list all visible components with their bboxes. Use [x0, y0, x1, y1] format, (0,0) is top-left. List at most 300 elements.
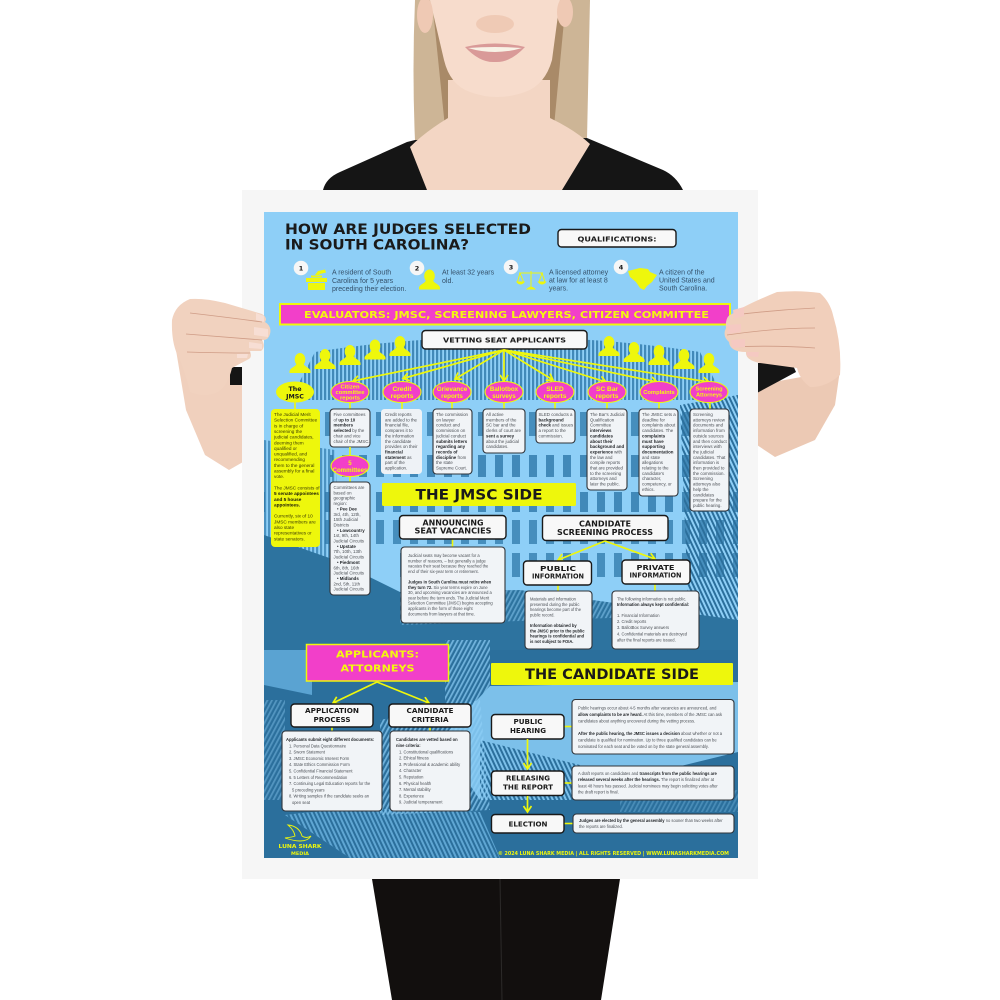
panel: ballotbox surveys: candidates. — [486, 444, 508, 449]
panel: SLED reports — [536, 382, 575, 443]
title: HOW ARE JUDGES SELECTED — [285, 222, 531, 238]
panel: SC Bar reports: interviews — [590, 428, 612, 433]
panel: credit reports: part of the — [385, 460, 405, 465]
qualification 1: residency: A resident of South — [332, 270, 391, 276]
panel: candidate criteria: CANDIDATE — [406, 707, 454, 715]
qualification 1: residency: preceding their election. — [332, 286, 406, 293]
panel: ballotbox surveys: about the judicial — [486, 439, 519, 444]
panel: screening attorneys: Screening — [693, 412, 713, 417]
panel: screening attorneys: and then conduct — [693, 439, 727, 444]
panel: screening attorneys: then provided to — [693, 466, 725, 470]
panel: the JMSC: qualified or — [274, 446, 297, 451]
step: public hearing: candidate is qualified for nomination. Up to three qualified candidates can be — [578, 738, 717, 742]
panel: ballotbox surveys: All active — [486, 412, 504, 417]
step: public hearing: candidates about anything uncovered during the vetting process. — [578, 718, 695, 723]
panel: 5 committees: Districts — [334, 522, 350, 527]
panel: the JMSC — [271, 382, 320, 547]
panel: grievance reports: on lawyer — [436, 417, 455, 422]
panel: complaints: complaints — [642, 433, 666, 438]
panel: complaints: supporting — [642, 444, 665, 449]
qualification 2: age: old. — [442, 278, 453, 285]
panel: grievance reports: Grievance — [437, 386, 468, 393]
step: releasing the report: least 48 hours has passed. Judicial nominees may begin soliciting votes after — [578, 783, 718, 788]
panel: the JMSC: deeming them — [274, 440, 304, 445]
panel: credit reports: reports — [391, 393, 414, 400]
qualification 3: licensed attorney: years. — [549, 285, 568, 292]
panel: SC Bar reports: compile reports — [590, 460, 621, 465]
panel: the JMSC: vote. — [274, 474, 284, 479]
panel: 5 committees: based on — [334, 490, 352, 495]
panel: application process: 2. Sworn Statement — [289, 750, 326, 755]
panel: grievance reports: regarding any — [436, 444, 466, 449]
panel: grievance reports: discipline — [436, 455, 457, 460]
step: public hearing: about whether or not a — [680, 731, 723, 736]
panel: citizen committee reports: Five committees — [334, 412, 366, 417]
step: public hearing: After the public hearing, the JMSC issues a decision — [578, 731, 680, 736]
panel: 5 committees: 15th Judicial — [334, 517, 358, 522]
panel: credit reports: Credit reports — [385, 412, 412, 417]
panel: grievance reports — [433, 382, 472, 474]
arrow: releasing the report to election — [526, 796, 528, 812]
panel: SLED reports: reports — [544, 393, 567, 400]
step: public hearing — [492, 700, 734, 754]
banner: applicants, attorneys: ATTORNEYS — [340, 664, 414, 674]
panel: public information: the JMSC prior to the public — [530, 628, 585, 633]
panel: citizen committee reports: committee — [336, 390, 365, 396]
panel: application process: 1. Personal Data Questionnaire — [289, 743, 347, 748]
panel: the JMSC: 5 senate appointees — [274, 491, 319, 496]
panel: grievance reports: The commission — [436, 412, 469, 417]
panel: complaints: Complaints — [643, 390, 675, 396]
panel: public information: Information obtained by — [530, 623, 577, 628]
panel: SLED reports: SLED — [546, 386, 564, 393]
panel: ballotbox surveys: clerks of court are — [486, 428, 521, 433]
panel: complaints — [639, 382, 678, 496]
panel: announcing seat vacancies: year before the term ends. The Judicial Merit — [408, 595, 490, 600]
panel: grievance reports: submits letters — [436, 439, 468, 444]
panel: application process: APPLICATION — [305, 707, 359, 715]
panel: grievance reports: reports — [441, 393, 463, 400]
panel: grievance reports: commission on — [436, 428, 466, 433]
panel: application process: open seat — [292, 800, 311, 805]
panel: screening attorneys: public hearing. — [693, 503, 722, 508]
icons: evaluator figures, right group — [598, 336, 720, 373]
panel: 5 committees: • Upstate — [337, 544, 356, 549]
panel: announcing seat vacancies: Six year terms expire on June — [432, 585, 488, 590]
panel: complaints: allegations — [642, 460, 664, 465]
panel: the JMSC: is in charge of — [274, 423, 304, 428]
panel: the JMSC: and 5 house — [274, 497, 302, 502]
panel: credit reports: are added to the — [385, 417, 418, 422]
heading: qualifications — [558, 230, 676, 247]
panel: the JMSC: The — [288, 386, 302, 393]
panel: public information: presented during the public — [530, 602, 579, 607]
panel: 5 committees: Judicial Circuits — [334, 555, 365, 560]
panel: announcing seat vacancies: applicants in the form of those eight — [408, 606, 473, 611]
panel: application process: 4. State Ethics Commission Form — [289, 762, 350, 767]
panel: credit reports: provides on their — [385, 444, 418, 449]
panel: candidate criteria: 1. Constitutional qualifications — [399, 749, 453, 754]
panel: ballotbox surveys: members of the — [486, 417, 517, 422]
panel: 5 committees: Judicial Circuits — [334, 571, 365, 576]
step: releasing the report: THE REPORT — [503, 784, 553, 792]
panel: SC Bar reports: candidates — [590, 433, 613, 438]
panel: complaints: character, — [642, 476, 661, 481]
panel: candidate criteria: 9. Judicial temperament — [399, 800, 443, 805]
panel: grievance reports: Supreme Court. — [436, 466, 467, 470]
panel: announcing seat vacancies: SEAT VACANCIES — [414, 527, 492, 536]
panel: screening attorneys: candidates — [693, 492, 715, 497]
panel: SC Bar reports: with — [613, 449, 623, 454]
panel: SC Bar reports: that are provided — [590, 466, 624, 470]
panel: complaints: documentation — [642, 449, 674, 454]
banner: evaluators — [280, 304, 730, 324]
panel: application process: 6. 5 Letters of Recommendation — [289, 775, 348, 780]
panel: the JMSC: them to the general — [274, 463, 314, 468]
heading: vetting seat applicants — [422, 330, 587, 349]
panel: application process: 3. JMSC Economic Interest Form — [289, 756, 350, 761]
panel: 5 committees: • Lowcountry — [337, 528, 365, 533]
panel: candidate screening process: CANDIDATE — [579, 520, 631, 528]
step: public hearing: HEARING — [510, 727, 546, 735]
panel: candidate criteria: Candidates are vetted based on — [396, 737, 458, 742]
panel: SC Bar reports: later the public. — [590, 482, 620, 487]
panel: private information: 3. BallotBox Survey answers — [617, 625, 669, 630]
heading: vetting seat applicants: VETTING SEAT APPLICANTS — [443, 337, 566, 345]
arrows: applicants to process and criteria — [333, 682, 429, 703]
panel: screening attorneys — [690, 382, 729, 511]
panel: private information: after the final reports are issued. — [617, 638, 676, 643]
panel: candidate criteria: 6. Physical health — [399, 781, 432, 786]
step: public hearing: allow complaints to be are heard. — [578, 712, 643, 717]
footer: copyright: © 2024 LUNA SHARK MEDIA | ALL RIGHTS RESERVED | WWW.LUNASHARKMEDIA.COM — [498, 851, 729, 857]
panel: grievance reports: the state — [436, 460, 453, 465]
panel: candidate criteria: CRITERIA — [412, 716, 449, 724]
panel: SC Bar reports: to the screening — [590, 471, 622, 476]
panel: grievance reports: records of — [436, 449, 458, 454]
panel: announcing seat vacancies: Judges in South Carolina must retire when — [408, 580, 492, 584]
panel: announcing seat vacancies: 30, and upcoming vacancies are announced a — [408, 590, 492, 595]
panel: candidate criteria: 4. Character — [399, 768, 422, 773]
icons: evaluator figures, left group — [290, 336, 410, 373]
panel: the JMSC: Currently, six of 10 — [274, 514, 313, 519]
panel: screening attorneys: candidates. That — [693, 455, 726, 460]
panel: screening attorneys: information from — [693, 428, 725, 433]
panel: private information: PRIVATE — [636, 564, 675, 572]
panel: application process — [282, 704, 382, 811]
panel: candidate criteria: nine criteria: — [396, 743, 421, 748]
panel: candidate criteria — [389, 704, 471, 811]
qualification 1: residency: 1 — [299, 264, 304, 272]
panel: announcing seat vacancies: ANNOUNCING — [422, 518, 484, 528]
panel: 5 committees: Judicial Circuits — [334, 538, 365, 544]
panel: private information — [612, 560, 699, 649]
panel: credit reports: compares it to — [385, 428, 413, 433]
panel: the JMSC: recommending — [274, 457, 305, 462]
panel: citizen committee reports — [330, 382, 370, 447]
panel: screening attorneys: attorneys review — [693, 417, 726, 422]
model: person holding the poster — [176, 0, 840, 1000]
panel: the JMSC: Selection Committee — [274, 418, 318, 423]
banner: the JMSC side — [382, 483, 576, 506]
panel: credit reports: application. — [385, 466, 407, 470]
step: public hearing: nominated for each seat and be voted on by the state general assembly. — [578, 744, 709, 749]
heading: qualifications: QUALIFICATIONS: — [578, 235, 657, 243]
panel: citizen committee reports: reports — [340, 396, 360, 402]
panel: announcing seat vacancies: Judicial seats may become vacant for a — [408, 553, 480, 558]
panel: announcing seat vacancies: they turn 72. — [408, 585, 432, 590]
panel: 5 committees — [330, 447, 370, 595]
step: releasing the report: RELEASING — [506, 774, 550, 782]
qualification 1: residency — [294, 261, 406, 293]
panel: complaints: competency, or — [642, 482, 672, 487]
panel: credit reports: financial — [385, 449, 403, 454]
panel: screening attorneys: the judicial — [693, 449, 714, 454]
panel: credit reports: the candidate — [385, 439, 412, 444]
poster frame — [242, 190, 758, 879]
panel: the JMSC: judicial candidates, — [273, 435, 314, 440]
panel: announcing seat vacancies: vacates their seat because they reached the — [408, 564, 489, 569]
panel: screening attorneys: documents and — [693, 423, 724, 428]
panel: screening attorneys: interviews with — [693, 444, 722, 449]
panel: 5 committees: Committees — [333, 467, 368, 474]
qualification 4: citizen, South Carolina state icon — [614, 260, 715, 292]
panel: application process: PROCESS — [314, 716, 351, 724]
panel: private information: Information always kept confidential: — [617, 602, 689, 607]
panel: announcing seat vacancies: documents from lawyers at that time. — [408, 611, 475, 616]
panel: grievance reports: from — [456, 455, 467, 460]
panel: 5 committees: 2nd, 5th, 11th — [334, 581, 361, 586]
panel: announcing seat vacancies — [400, 516, 506, 623]
qualification 1: residency: Carolina for 5 years — [332, 278, 394, 285]
panel: the JMSC: unqualified, and — [274, 452, 307, 457]
banner: the candidate side: THE CANDIDATE SIDE — [525, 667, 699, 683]
panel: SLED reports: and issues — [551, 423, 574, 428]
panel: complaints: The JMSC sets a — [642, 412, 676, 417]
panel: SC Bar reports: experience — [590, 449, 614, 454]
panel: complaints: relating to the — [642, 466, 669, 470]
panel: complaints: deadline for — [642, 417, 665, 422]
panel: SC Bar reports: reports — [596, 393, 619, 400]
step: releasing the report: released several weeks after the hearings. — [578, 777, 660, 782]
banner: evaluators: EVALUATORS: JMSC, SCREENING LAWYERS, CITIZEN COMMITTEE — [304, 310, 709, 321]
panel: SC Bar reports — [587, 382, 627, 490]
step: public hearing: At this time, members of the JMSC can ask — [643, 712, 723, 717]
panel: complaints: candidates. The — [642, 428, 674, 433]
panel: private information: 4. Confidential materials are destroyed — [617, 631, 688, 636]
panel: candidate screening process: SCREENING PROCESS — [557, 528, 653, 537]
panel: credit reports: as — [406, 455, 412, 460]
panel: credit reports: statement — [385, 455, 406, 460]
panel: ballotbox surveys: sent a survey — [486, 433, 515, 438]
panel: screening attorneys: outside sources — [693, 433, 725, 438]
panel: ballotbox surveys: Ballotbox — [490, 386, 519, 393]
panel: public information: hearings become part of the — [530, 607, 582, 612]
panel: the JMSC: assembly for a final — [274, 468, 314, 474]
panel: public information: is not subject to FOIA. — [530, 639, 573, 644]
panel: application process: 5. Confidential Financial Statement — [289, 768, 353, 774]
panel: application process: 8. Writing samples if the candidate seeks an — [289, 794, 370, 799]
model: left hand gripping poster — [172, 299, 270, 395]
panel: 5 committees: • Midlands — [337, 576, 359, 581]
panel: ballotbox surveys: SC bar and the — [486, 423, 516, 428]
panel: ballotbox surveys: surveys — [492, 393, 516, 400]
step: public hearing: PUBLIC — [514, 718, 543, 726]
panel: the JMSC: JMSC members are — [274, 519, 316, 524]
panel: citizen committee reports: up to 10 — [338, 417, 356, 422]
panel: SLED reports: SLED conducts a — [538, 412, 573, 417]
arrows: vetting to each evaluator — [353, 350, 709, 382]
panel: the JMSC: appointees. — [274, 502, 300, 507]
panel: candidate criteria: 5. Reputation — [399, 774, 424, 780]
banner: applicants, attorneys — [306, 644, 448, 681]
panel: candidate criteria: 7. Mental stability — [399, 787, 432, 792]
step: election: ELECTION — [508, 820, 548, 828]
panel: the JMSC: JMSC — [285, 394, 304, 400]
panel: screening attorneys: prepare for the — [693, 498, 722, 503]
step: releasing the report: The report is finalized after at — [660, 777, 715, 782]
panel: 5 committees: geographic — [334, 496, 356, 501]
panel: the JMSC: state senators. — [274, 536, 305, 541]
step: election: no sooner than two weeks after — [665, 818, 723, 823]
step: election: the reports are finalized. — [579, 824, 623, 829]
qualification 2: age: 2 — [415, 264, 419, 272]
panel: SLED reports: check — [538, 423, 552, 428]
panel: SC Bar reports: background and — [590, 444, 624, 449]
panel: SC Bar reports: attorneys and — [590, 476, 617, 481]
panel: complaints: candidate's — [642, 471, 665, 476]
qualification 3: licensed attorney: 3 — [509, 264, 513, 272]
panel: 5 committees: • Pee Dee — [337, 506, 357, 511]
panel: public information: Materials and information — [530, 596, 577, 602]
step: releasing the report: A draft reports on candidates and — [578, 771, 639, 776]
panel: public information: INFORMATION — [532, 572, 584, 580]
qualification 3: licensed attorney: at law for at least 8 — [549, 277, 608, 284]
step: election: Judges are elected by the general assembly — [579, 818, 665, 823]
panel: credit reports — [381, 382, 422, 474]
panel: ballotbox surveys — [483, 382, 525, 453]
step: public hearing: Public hearings occur about 4-5 months after vacancies are announced, and — [578, 706, 717, 710]
panel: 5 committees: 3rd, 4th, 12th, — [334, 512, 361, 517]
panel: private information: 1. Financial Information — [617, 613, 660, 618]
panel: announcing seat vacancies: number of reasons, – but generally a judge — [408, 558, 487, 563]
panel: the JMSC: The Judicial Merit — [274, 412, 311, 417]
panel: candidate criteria: 3. Professional & academic ability — [399, 762, 461, 767]
panel: the JMSC: screening the — [274, 429, 303, 434]
panel: private information: The following information is not public. — [617, 596, 686, 602]
qualification 4: citizen, South Carolina state icon: United States and — [659, 277, 715, 284]
banner: the candidate side — [491, 663, 733, 685]
panel: the JMSC: also state — [274, 525, 294, 530]
panel: SC Bar reports: The Bar's Judicial — [590, 412, 625, 417]
panel: 5 committees: region: — [334, 501, 347, 506]
panel: 5 committees: • Piedmont — [337, 560, 360, 565]
panel: private information: 2. Credit reports — [617, 619, 646, 624]
panel: credit reports: the information — [385, 433, 415, 438]
panel: 5 committees: 7th, 10th, 13th — [334, 549, 362, 554]
panel: announcing seat vacancies: end of their six-year term or retirement. — [408, 569, 479, 574]
panel: citizen committee reports: by the — [351, 428, 365, 433]
arrow: public hearing to releasing the report — [526, 739, 528, 769]
panel: citizen committee reports: chair and vice — [334, 433, 361, 438]
panel: credit reports: financial file, — [385, 423, 409, 428]
title: IN SOUTH CAROLINA? — [285, 238, 469, 254]
panel: SLED reports: background — [538, 417, 564, 422]
model: right hand gripping poster — [725, 291, 840, 387]
qualification 4: citizen, South Carolina state icon: A citizen of the — [659, 269, 705, 276]
panel: screening attorneys: Screening — [695, 386, 723, 392]
panel: public information: hearings is confidential and — [530, 634, 585, 639]
panel: citizen committee reports: Citizen — [340, 384, 360, 390]
panel: candidate screening process — [542, 516, 668, 540]
panel: 5 committees: 6th, 8th, 16th — [334, 565, 360, 570]
panel: public information: public record. — [530, 612, 555, 617]
panel: public information: PUBLIC — [540, 565, 576, 573]
panel: credit reports: Credit — [392, 386, 412, 393]
panel: SLED reports: a report to the — [538, 428, 566, 433]
panel: screening attorneys: the commission. — [693, 471, 725, 476]
qualification 3: licensed attorney: A licensed attorney — [549, 269, 609, 276]
panel: SC Bar reports: Qualification — [590, 417, 615, 422]
panel: screening attorneys: Screening — [693, 476, 713, 481]
title — [285, 222, 531, 254]
panel: application process: Applicants submit eight different documents: — [286, 737, 374, 742]
panel: screening attorneys: attorneys also — [693, 482, 721, 487]
banner: the JMSC side: THE JMSC SIDE — [416, 488, 542, 504]
qualification 4: citizen, South Carolina state icon: 4 — [619, 264, 624, 272]
panel: candidate criteria: 2. Ethical fitness — [399, 756, 429, 761]
logo: Luna Shark Media: LUNA SHARK — [278, 844, 323, 850]
logo: Luna Shark Media — [278, 825, 323, 857]
panel: the JMSC: The JMSC consists of — [274, 485, 320, 490]
panel: SC Bar reports: the law and — [590, 455, 613, 460]
step: releasing the report: the draft report is final. — [578, 790, 619, 795]
panel: SC Bar reports: Committee — [590, 423, 612, 428]
panel: screening attorneys: information is — [693, 460, 720, 465]
panel: SC Bar reports: about their — [590, 439, 613, 444]
panel: 5 committees: Judicial Circuits — [334, 587, 365, 592]
qualification 2: age: At least 32 years — [442, 270, 495, 276]
panel: complaints: ethics. — [642, 487, 655, 492]
panel: announcing seat vacancies: Selection Committee (JMSC) begins accepting — [408, 601, 493, 606]
qualification 3: licensed attorney — [504, 260, 609, 292]
panel: grievance reports: conduct and — [436, 423, 460, 428]
panel: 5 committees: 5 — [348, 460, 352, 467]
panel: citizen committee reports: selected — [334, 428, 351, 433]
arrows: screening to public and private information — [558, 541, 655, 560]
panel: SLED reports: commission. — [538, 433, 563, 438]
poster background artwork — [264, 212, 738, 858]
panel: complaints: complaints about — [642, 423, 676, 428]
step: election — [492, 814, 734, 833]
panel: application process: 5 preceding years — [292, 787, 325, 792]
panel: 5 committees: Committees are — [334, 485, 365, 490]
panel: citizen committee reports: of — [334, 417, 338, 422]
panel: screening attorneys: help the — [693, 487, 709, 492]
panel: screening attorneys: Attorneys — [696, 392, 722, 398]
panel: citizen committee reports: chair of the JMSC. — [334, 439, 370, 444]
panel: SC Bar reports: SC Bar — [596, 386, 618, 393]
panel: 5 committees: 1st, 9th, 14th — [334, 533, 359, 538]
panel: complaints: must have — [642, 439, 664, 444]
panel: private information: INFORMATION — [630, 572, 682, 580]
panel: public information — [524, 561, 592, 649]
panel: candidate criteria: 8. Experience — [399, 793, 425, 798]
banner: applicants, attorneys: APPLICANTS: — [336, 650, 419, 660]
panel: citizen committee reports: members — [334, 423, 354, 428]
panel: the JMSC: representatives or — [274, 531, 312, 536]
logo: Luna Shark Media: MEDIA — [291, 851, 309, 857]
